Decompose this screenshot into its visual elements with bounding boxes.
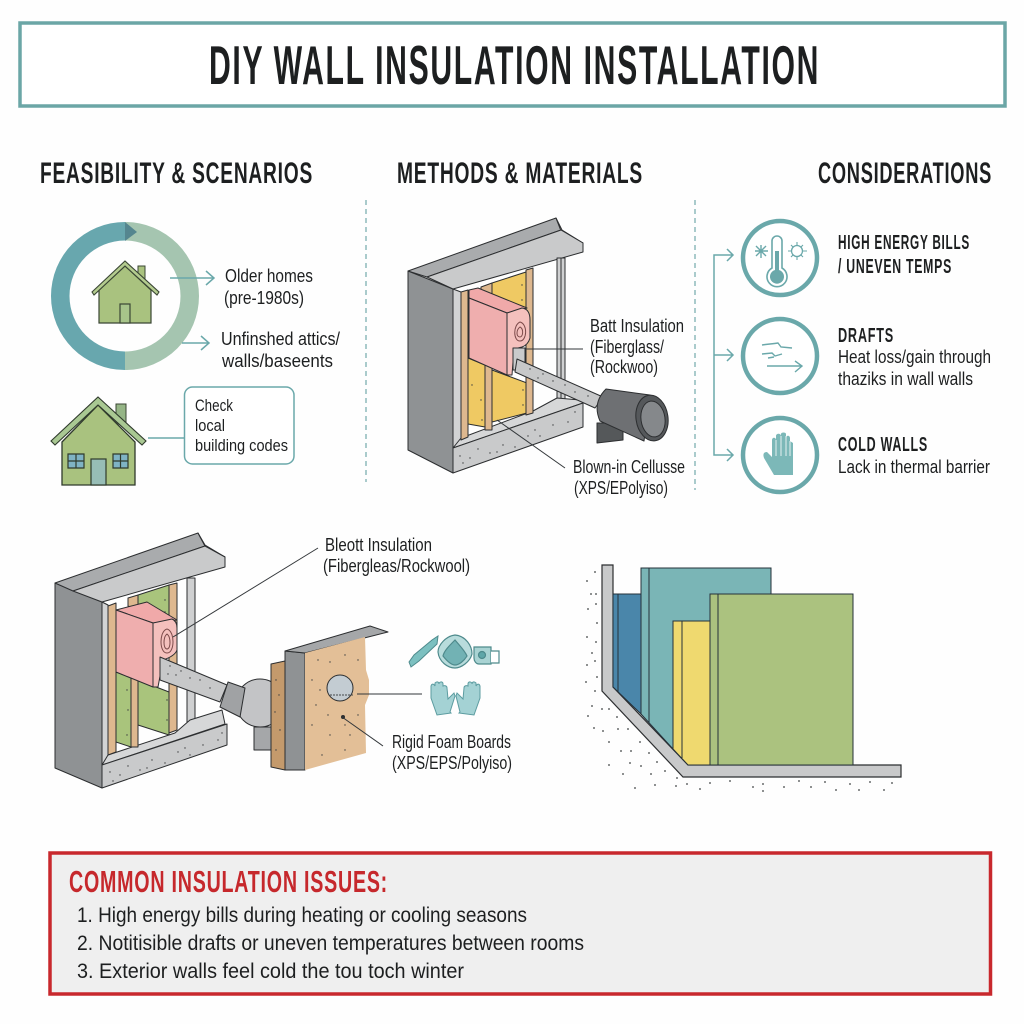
issue list: 2. Notitisible drafts or uneven temperatures between rooms	[77, 932, 584, 955]
panel: feasibility and scenarios	[51, 222, 340, 485]
panel: common insulation issues	[50, 853, 990, 994]
callout: building codes: building codes	[195, 436, 288, 455]
text: unfinished areas: walls/baseents	[221, 351, 333, 371]
insulation yellow bays	[461, 268, 533, 440]
blown-in hose and blower	[160, 657, 284, 750]
donut ring	[51, 222, 199, 370]
text: unfinished areas	[221, 329, 340, 371]
panel: considerations	[714, 221, 991, 492]
soil dots	[586, 572, 892, 791]
callout: building codes: Check	[195, 396, 233, 415]
issue list: 1. High energy bills during heating or cooling seasons	[77, 904, 527, 927]
leader lines	[497, 349, 583, 468]
text: cold walls: Lack in thermal barrier	[838, 457, 990, 477]
leader lines	[173, 548, 422, 746]
icon: tape measure	[474, 647, 499, 664]
text: cold walls	[838, 434, 990, 477]
label: rigid foam boards: Rigid Foam Boards	[392, 732, 511, 752]
icon: cold hand	[743, 418, 817, 492]
heading: feasibility: FEASIBILITY & SCENARIOS	[40, 157, 313, 190]
icon: house with windows	[51, 397, 146, 485]
label: batt insulation	[590, 316, 684, 377]
label: batt insulation: (Fiberglass/	[590, 337, 664, 357]
label: blanket insulation: (Fibergleas/Rockwool)	[323, 556, 470, 576]
wall frame	[408, 218, 583, 473]
yellow board	[673, 621, 710, 765]
bracket arrows	[714, 249, 733, 461]
insulation green bays	[108, 583, 177, 755]
heading: methods: METHODS & MATERIALS	[397, 157, 643, 190]
icon: drafts	[743, 319, 817, 393]
icon: gloves	[431, 682, 480, 715]
callout: building codes	[148, 387, 294, 464]
text: high energy bills: / UNEVEN TEMPS	[838, 256, 952, 278]
blown-in hose and blower	[513, 348, 671, 443]
text: unfinished areas: Unfinshed attics/	[221, 329, 340, 349]
text: drafts: DRAFTS	[838, 325, 894, 347]
arrow: unfinished	[182, 336, 209, 350]
icon: thermometer	[743, 221, 817, 295]
batt roll	[116, 602, 177, 687]
icon: respirator mask	[438, 635, 472, 668]
panel: methods diagram bottom	[55, 533, 512, 788]
text: high energy bills	[838, 232, 970, 278]
issue list	[77, 904, 584, 983]
blue board	[613, 594, 641, 714]
label: batt insulation: Batt Insulation	[590, 316, 684, 336]
label: rigid foam boards	[392, 732, 512, 773]
text: older homes	[224, 266, 313, 308]
label: blanket insulation: Bleott Insulation	[325, 535, 432, 555]
diagram: layered wall boards	[586, 565, 901, 791]
teal board	[641, 568, 771, 749]
issues heading: COMMON INSULATION ISSUES:	[69, 864, 388, 899]
icon: utility knife	[409, 636, 438, 667]
rigid foam board	[271, 626, 388, 770]
label: batt insulation: (Rockwoo)	[590, 357, 658, 377]
arrow: older homes	[170, 271, 214, 285]
text: older homes: Older homes	[225, 266, 313, 286]
text: drafts: thaziks in wall walls	[838, 369, 973, 389]
label: blown-in	[573, 457, 685, 498]
text: cold walls: COLD WALLS	[838, 434, 928, 456]
icon: house in ring	[92, 261, 159, 323]
title	[20, 23, 1005, 106]
label: blanket insulation	[323, 535, 470, 576]
wall frame	[55, 533, 227, 788]
label: rigid foam boards: (XPS/EPS/Polyiso)	[392, 753, 512, 773]
text: drafts	[838, 325, 991, 389]
panel: methods diagram top	[408, 218, 685, 498]
text: drafts: Heat loss/gain through	[838, 347, 991, 367]
green board	[710, 594, 853, 765]
issue list: 3. Exterior walls feel cold the tou toch winter	[77, 960, 464, 983]
concrete wall	[602, 565, 901, 777]
text: older homes: (pre-1980s)	[224, 288, 304, 308]
callout: building codes: local	[195, 416, 225, 435]
label: blown-in: (XPS/EPolyiso)	[574, 478, 668, 498]
label: blown-in: Blown-in Cellusse	[573, 457, 685, 477]
batt roll	[469, 288, 530, 375]
